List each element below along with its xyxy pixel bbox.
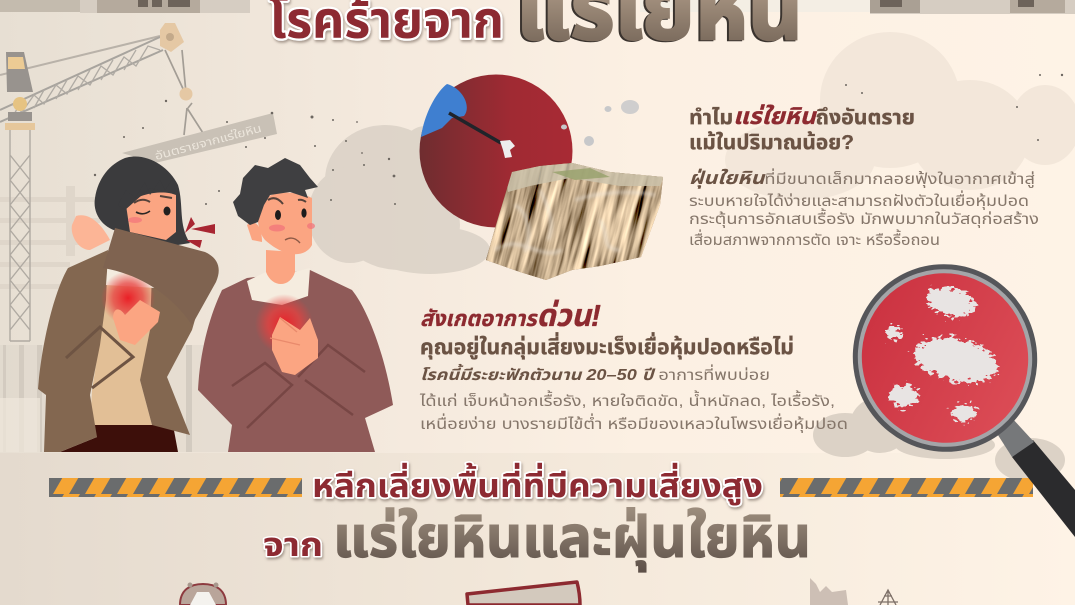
jacket right panel <box>140 272 205 435</box>
hazard stripe: right <box>780 478 1033 497</box>
text block: fine asbestos dust <box>689 168 1039 249</box>
asbestos rock <box>486 163 663 280</box>
shirt <box>90 262 155 425</box>
icon: ruined building <box>810 578 898 605</box>
heading: watch for symptoms: สังเกตอาการด่วน! <box>420 298 601 333</box>
sweater <box>198 270 393 452</box>
hazard stripe: left <box>49 478 302 497</box>
title: โรคร้ายจาก แร่ใยหิน <box>269 0 803 59</box>
text block: fine asbestos dust: ระบบหายใจได้ง่ายและสามารถฝังตัวในเยื่อหุ้มปอด <box>689 190 1029 210</box>
heading: avoid high-risk areas: แร่ใยหินและฝุ่นใยหิน <box>333 505 811 572</box>
text block: symptoms <box>419 363 848 433</box>
character: man holding chest <box>198 158 393 452</box>
hair <box>233 158 318 225</box>
text block: fine asbestos dust: กระตุ้นการอักเสบเรื้อรัง มักพบมากในวัสดุก่อสร้าง <box>689 208 1039 228</box>
collar <box>247 268 310 305</box>
background dust clouds <box>308 32 1075 482</box>
background buildings and fence <box>0 0 1075 452</box>
text block: fine asbestos dust: ฝุ่นใยหิน ที่มีขนาดเล็กมากลอยฟุ้งในอากาศเข้าสู่ <box>689 168 1035 189</box>
cough marks <box>185 217 215 248</box>
red circle with tweezers <box>420 74 572 228</box>
text block: symptoms: โรคนี้มีระยะฟักตัวนาน 20–50 ปี อาการที่พบบ่อย <box>420 363 770 384</box>
blue glove <box>421 84 467 137</box>
heading: why asbestos is dangerous: แม้ในปริมาณน้อย? <box>689 132 854 154</box>
raised fist <box>72 215 110 250</box>
asbestos fibres in lens <box>886 282 1002 422</box>
hair <box>95 157 190 246</box>
face <box>126 192 176 240</box>
face <box>257 193 312 254</box>
heading: watch for symptoms <box>420 298 794 360</box>
character: woman coughing <box>38 157 219 452</box>
magnifying glass <box>828 240 1075 537</box>
text block: symptoms: ได้แก่ เจ็บหน้าอกเรื้อรัง, หายใจติดขัด, น้ำหนักลด, ไอเรื้อรัง, <box>419 390 835 410</box>
heading: why asbestos is dangerous <box>689 103 915 154</box>
hand on chest <box>113 300 160 345</box>
heading: watch for symptoms: คุณอยู่ในกลุ่มเสี่ยงมะเร็งเยื่อหุ้มปอดหรือไม่ <box>420 332 794 360</box>
sleeve cuff lines <box>232 345 365 428</box>
hands <box>272 317 318 375</box>
heading: avoid high-risk areas <box>263 462 811 572</box>
raised sleeve <box>103 228 219 325</box>
heading: avoid high-risk areas: หลีกเลี่ยงพื้นที่ที่มีความเสี่ยงสูง <box>312 462 763 506</box>
hanging sign: อันตรายจากแร่ใยหิน <box>122 113 277 163</box>
heading: why asbestos is dangerous: ทำไมแร่ใยหิน ถึงอันตราย <box>689 103 915 129</box>
chest glow <box>255 294 313 354</box>
text block: symptoms: เหนื่อยง่าย บางรายมีไข้ต่ำ หรือมีของเหลวในโพรงเยื่อหุ้มปอด <box>420 413 848 433</box>
icon: warning sign board <box>467 582 580 605</box>
sleeve cuff <box>66 327 133 388</box>
chest glow <box>101 271 155 325</box>
text block: fine asbestos dust: เสื่อมสภาพจากการตัด เจาะ หรือรื้อถอน <box>689 229 940 249</box>
icon: respirator mask <box>180 582 226 605</box>
heading: avoid high-risk areas: จาก <box>263 526 323 563</box>
hanging sign: อันตรายจากแร่ใยหิน: อันตรายจากแร่ใยหิน <box>153 121 263 163</box>
neck <box>266 250 295 286</box>
dust specks <box>561 100 639 146</box>
dust particles <box>94 74 1063 205</box>
jacket left panel <box>38 250 108 452</box>
fringe <box>118 180 178 210</box>
icon: construction crane <box>0 23 203 341</box>
collar <box>106 258 157 288</box>
trouser <box>60 425 178 452</box>
